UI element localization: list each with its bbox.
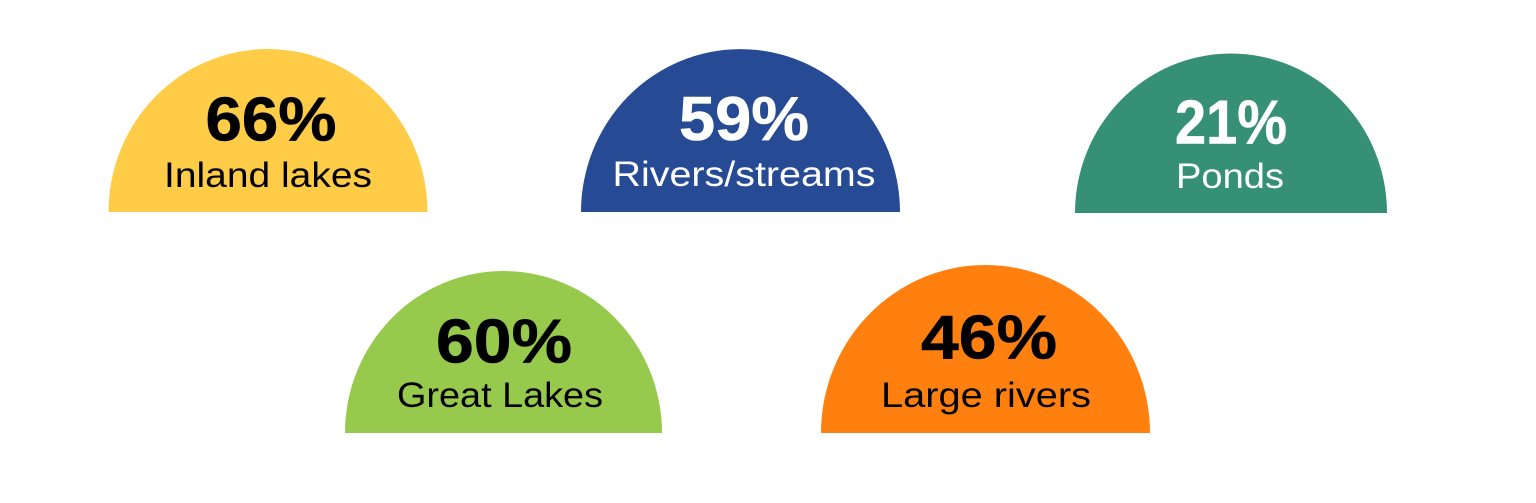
value: 66%: 66% — [206, 86, 336, 154]
label: large rivers: Large rivers — [881, 376, 1091, 415]
value: 21%: 21% — [1175, 88, 1287, 158]
label: inland lakes: Inland lakes — [164, 156, 372, 195]
panel: great lakes — [345, 271, 662, 433]
panel: inland lakes — [108, 49, 428, 212]
panel: large rivers — [821, 265, 1150, 433]
value: 59%: 59% — [679, 85, 809, 154]
value: 46%: 46% — [921, 304, 1057, 372]
label: ponds: Ponds — [1176, 157, 1284, 196]
label: great lakes: Great Lakes — [397, 376, 603, 415]
panel: ponds — [1075, 53, 1387, 213]
value: 60%: 60% — [436, 308, 572, 376]
label: rivers/streams: Rivers/streams — [612, 155, 876, 194]
panel: rivers/streams — [581, 49, 900, 212]
